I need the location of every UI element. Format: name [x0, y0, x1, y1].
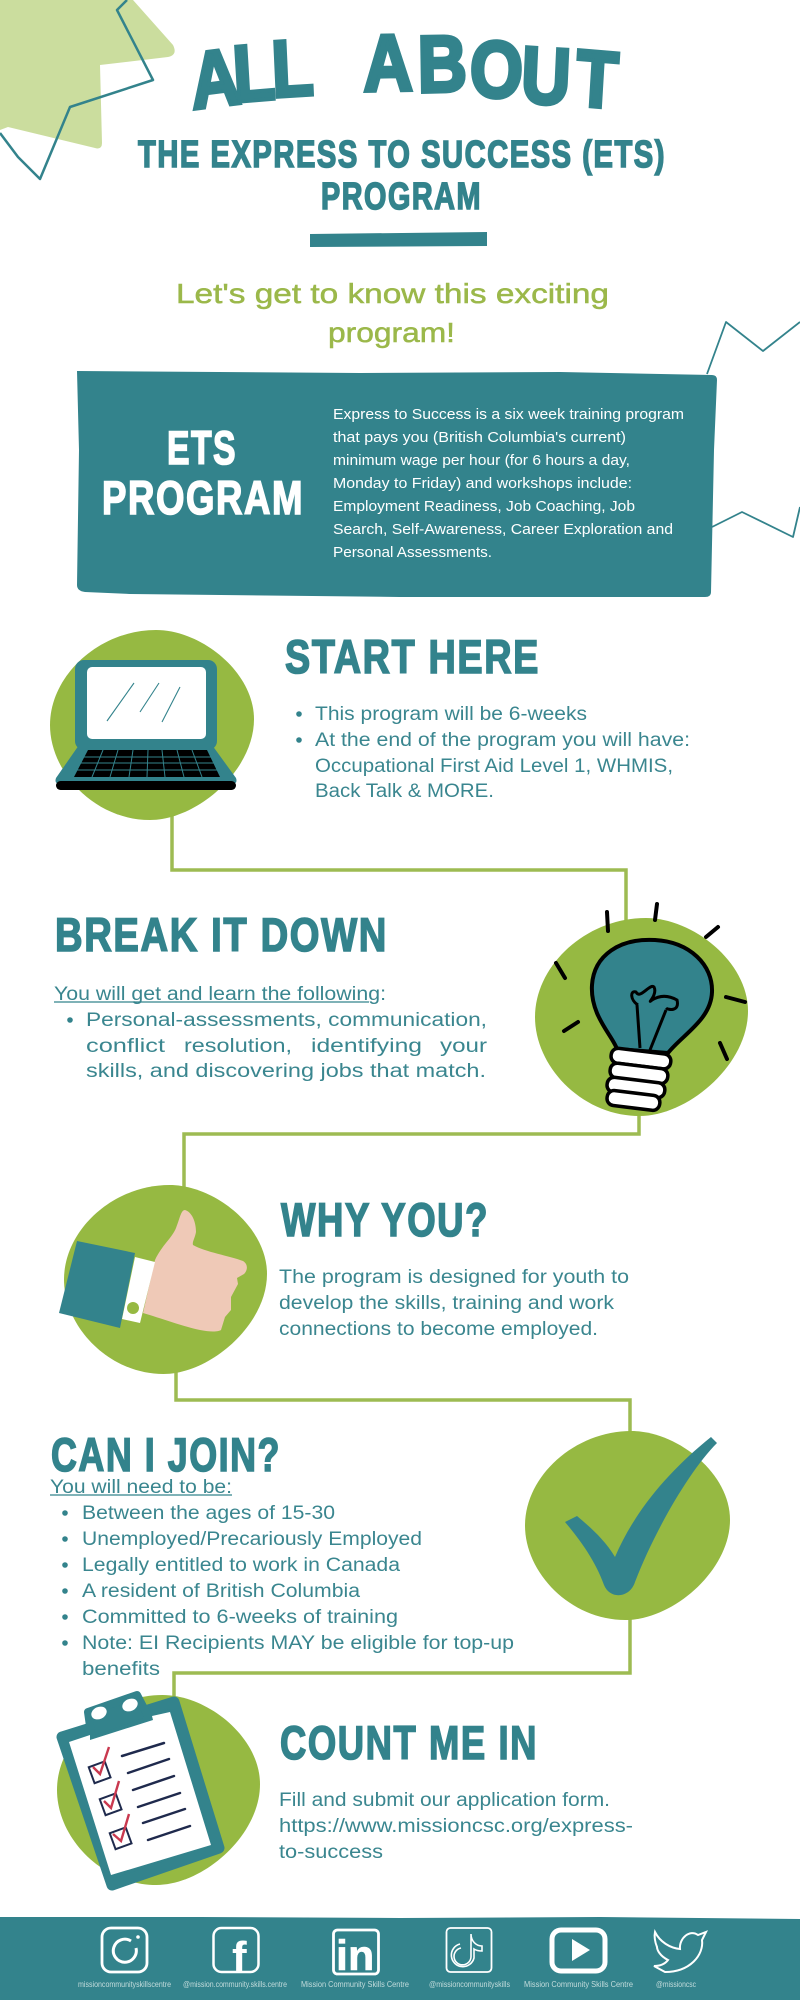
- footer band with social links: [0, 1917, 800, 2000]
- panel description: minimum wage per hour (for 6 hours a day,: [333, 452, 630, 469]
- bullet: learning outcomes: identifying: [311, 1036, 422, 1057]
- sub-heading: requirements: You will need to be:: [50, 1477, 232, 1498]
- panel description: Search, Self-Awareness, Career Exploration and: [333, 521, 673, 538]
- footer captions: @missioncommunityskills: [429, 1980, 510, 1989]
- bullet: learning outcomes: conflict: [86, 1036, 166, 1057]
- text: application instructions: to-success: [279, 1842, 383, 1863]
- bullet list: requirements: Legally entitled to work in Canada: [82, 1555, 400, 1576]
- text: application instructions: [279, 1790, 633, 1863]
- tagline: Let's get to know this exciting: [176, 278, 609, 309]
- section: why you: [59, 1185, 629, 1374]
- heading: start here: START HERE: [285, 630, 540, 683]
- bullet: learning outcomes: Personal-assessments, communication,: [86, 1010, 487, 1031]
- panel description: Personal Assessments.: [333, 544, 492, 561]
- bullet: learning outcomes: [67, 1010, 488, 1082]
- section: break it down: [54, 904, 748, 1116]
- bullet: learning outcomes: your: [440, 1036, 488, 1057]
- text: application instructions: https://www.missioncsc.org/express-: [279, 1816, 633, 1837]
- decoration: top-left green shape and outline: [0, 0, 175, 179]
- bullet list: requirements: A resident of British Columbia: [82, 1581, 360, 1602]
- icon: light bulb on green blob: [535, 904, 748, 1116]
- section: count me in: [57, 1695, 633, 1885]
- heading: break it down: BREAK IT DOWN: [55, 908, 388, 961]
- bullet list: requirements: Note: EI Recipients MAY be eligible for top-up: [82, 1633, 514, 1654]
- footer captions: [78, 1980, 696, 1989]
- footer captions: missioncommunityskillscentre: [78, 1980, 171, 1989]
- bullet list: requirements: Between the ages of 15-30: [82, 1503, 335, 1524]
- sub-heading: what you learn: You will get and learn the following:: [54, 984, 386, 1005]
- icon: linkedin: in: [336, 1932, 374, 1980]
- tagline: [176, 278, 609, 348]
- bullet list: requirements: benefits: [82, 1659, 160, 1680]
- text: why you description: The program is designed for youth to: [279, 1267, 629, 1288]
- connector lines: [172, 815, 639, 1700]
- panel heading: ETS: [167, 421, 237, 474]
- bullet list: requirements: Unemployed/Precariously Employed: [82, 1529, 422, 1550]
- icon: twitter: [654, 1932, 706, 1972]
- panel description: Employment Readiness, Job Coaching, Job: [333, 498, 635, 515]
- panel heading: PROGRAM: [102, 471, 304, 524]
- icon: facebook: f: [232, 1933, 247, 1982]
- panel: ETS program: [77, 371, 717, 597]
- tagline: program!: [328, 317, 455, 348]
- title: first line: ABOUT: [363, 18, 620, 126]
- decoration: right-side zigzag outline: [707, 322, 800, 537]
- title: [138, 18, 666, 218]
- text: why you description: connections to become employed.: [279, 1319, 598, 1340]
- bullet: learning outcomes: skills, and discovering jobs that match.: [86, 1061, 486, 1082]
- icon: tiktok: [446, 1928, 492, 1972]
- bullet list: requirements: Committed to 6-weeks of training: [82, 1607, 398, 1628]
- text: why you description: develop the skills, training and work: [279, 1293, 615, 1314]
- bullet list: program details: At the end of the program you will have:: [315, 730, 690, 751]
- bullet list: program details: Occupational First Aid Level 1, WHMIS,: [315, 756, 673, 777]
- panel description: Express to Success is a six week training program: [333, 406, 684, 423]
- icon: laptop on green blob: [50, 630, 254, 820]
- icon: youtube: [552, 1930, 605, 1971]
- heading: count me in: COUNT ME IN: [280, 1716, 538, 1769]
- icon: facebook: [214, 1928, 258, 1982]
- panel description: that pays you (British Columbia's current): [333, 429, 626, 446]
- bullet list: program details: This program will be 6-weeks: [315, 704, 587, 725]
- icon: clipboard checklist on green blob: [57, 1695, 260, 1885]
- icon: check mark on green blob: [525, 1431, 730, 1620]
- bullet: learning outcomes: resolution,: [184, 1036, 292, 1057]
- footer captions: Mission Community Skills Centre: [301, 1980, 410, 1989]
- text: why you description: [279, 1267, 629, 1340]
- bullet list: program details: [296, 704, 690, 802]
- panel description: [333, 406, 684, 561]
- section: can I join: [50, 1428, 730, 1680]
- text: application instructions: Fill and submit our application form.: [279, 1790, 610, 1811]
- icon: thumbs up on green blob: [59, 1185, 267, 1374]
- panel heading: [102, 421, 304, 524]
- bullet list: requirements: [62, 1503, 514, 1680]
- title: program line: PROGRAM: [321, 176, 482, 218]
- footer captions: @mission.community.skills.centre: [183, 1980, 287, 1989]
- heading: why you: WHY YOU?: [281, 1193, 489, 1246]
- section: start here: [50, 630, 690, 820]
- icon: instagram: [102, 1928, 147, 1972]
- title underline bar: [310, 232, 487, 247]
- bullet list: program details: Back Talk & MORE.: [315, 781, 494, 802]
- footer captions: @missioncsc: [656, 1980, 696, 1989]
- heading: can I join: CAN I JOIN?: [51, 1428, 281, 1481]
- footer captions: Mission Community Skills Centre: [524, 1980, 634, 1989]
- title: first line: ALL: [187, 22, 315, 126]
- title: first line: [187, 18, 620, 126]
- panel description: Monday to Friday) and workshops include:: [333, 475, 632, 492]
